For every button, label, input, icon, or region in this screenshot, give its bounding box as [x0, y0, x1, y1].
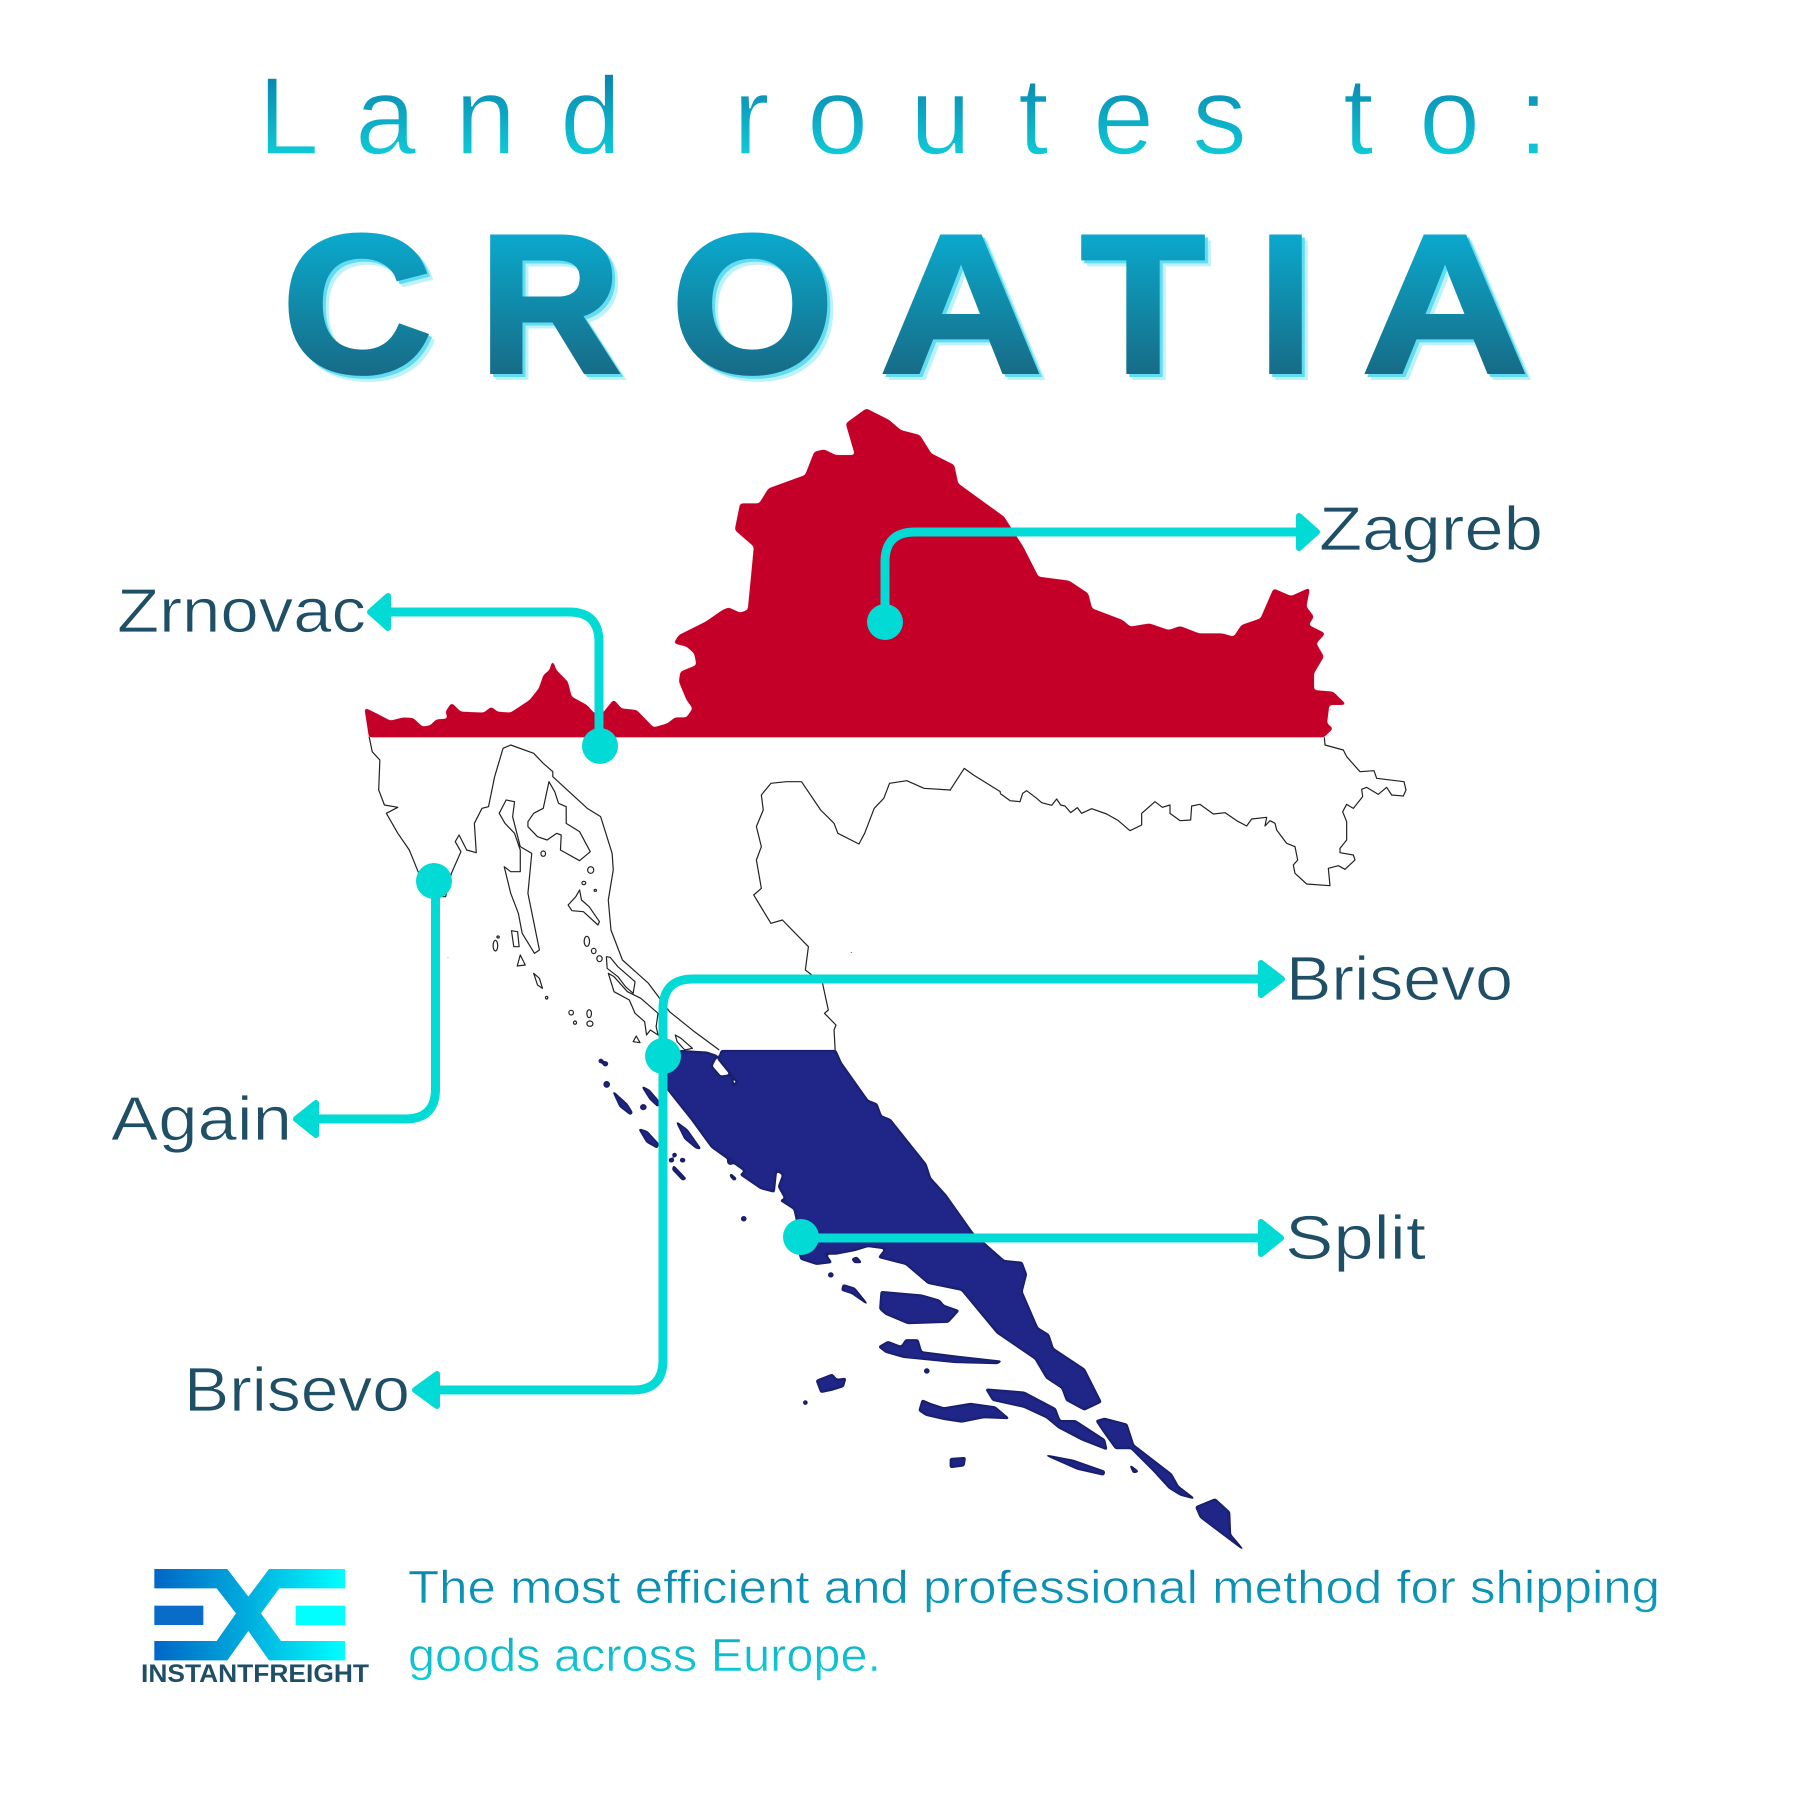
label: Brisevo right: Brisevo: [1286, 945, 1513, 1014]
tagline: goods across Europe.: [408, 1629, 881, 1681]
label: Split: Split: [1285, 1204, 1426, 1273]
logo wordmark: INSTANTFREIGHT: [141, 1660, 369, 1688]
label: Zrnovac: Zrnovac: [117, 577, 366, 646]
label: Brisevo left: Brisevo: [184, 1356, 410, 1425]
title: Land routes to: Land routes to:: [258, 55, 1549, 178]
map: white band coast outline: [369, 737, 950, 1051]
map: red band: [364, 408, 1347, 737]
tagline: The most efficient and professional method for shipping: [408, 1561, 1660, 1613]
icon: EXE mark: [154, 1569, 345, 1660]
route connector: Split: [783, 1219, 1281, 1255]
logo: InstantFreight: [141, 1569, 369, 1688]
route connector: Again: [296, 863, 452, 1135]
heading: CROATIA: I: [1258, 194, 1313, 414]
map of Croatia in flag colours: [364, 408, 1406, 1549]
label: Again: Again: [111, 1085, 292, 1154]
label: Zagreb: Zagreb: [1319, 495, 1543, 564]
route connectors: Brisevo pair: [415, 963, 1282, 1406]
map: eastern border outline: [1000, 737, 1406, 886]
heading: CROATIA: A: [880, 194, 1042, 414]
heading: CROATIA: O: [671, 194, 834, 414]
map: northern border outline joining: [950, 768, 1000, 793]
heading: CROATIA: A: [1362, 194, 1528, 414]
heading: CROATIA: C: [282, 194, 432, 414]
heading: CROATIA: R: [479, 194, 621, 414]
route connector: Zagreb: [867, 516, 1317, 640]
heading: CROATIA: T: [1081, 194, 1205, 414]
map: blue band and islands: [599, 1051, 1243, 1549]
route connector: Zrnovac: [370, 596, 618, 764]
